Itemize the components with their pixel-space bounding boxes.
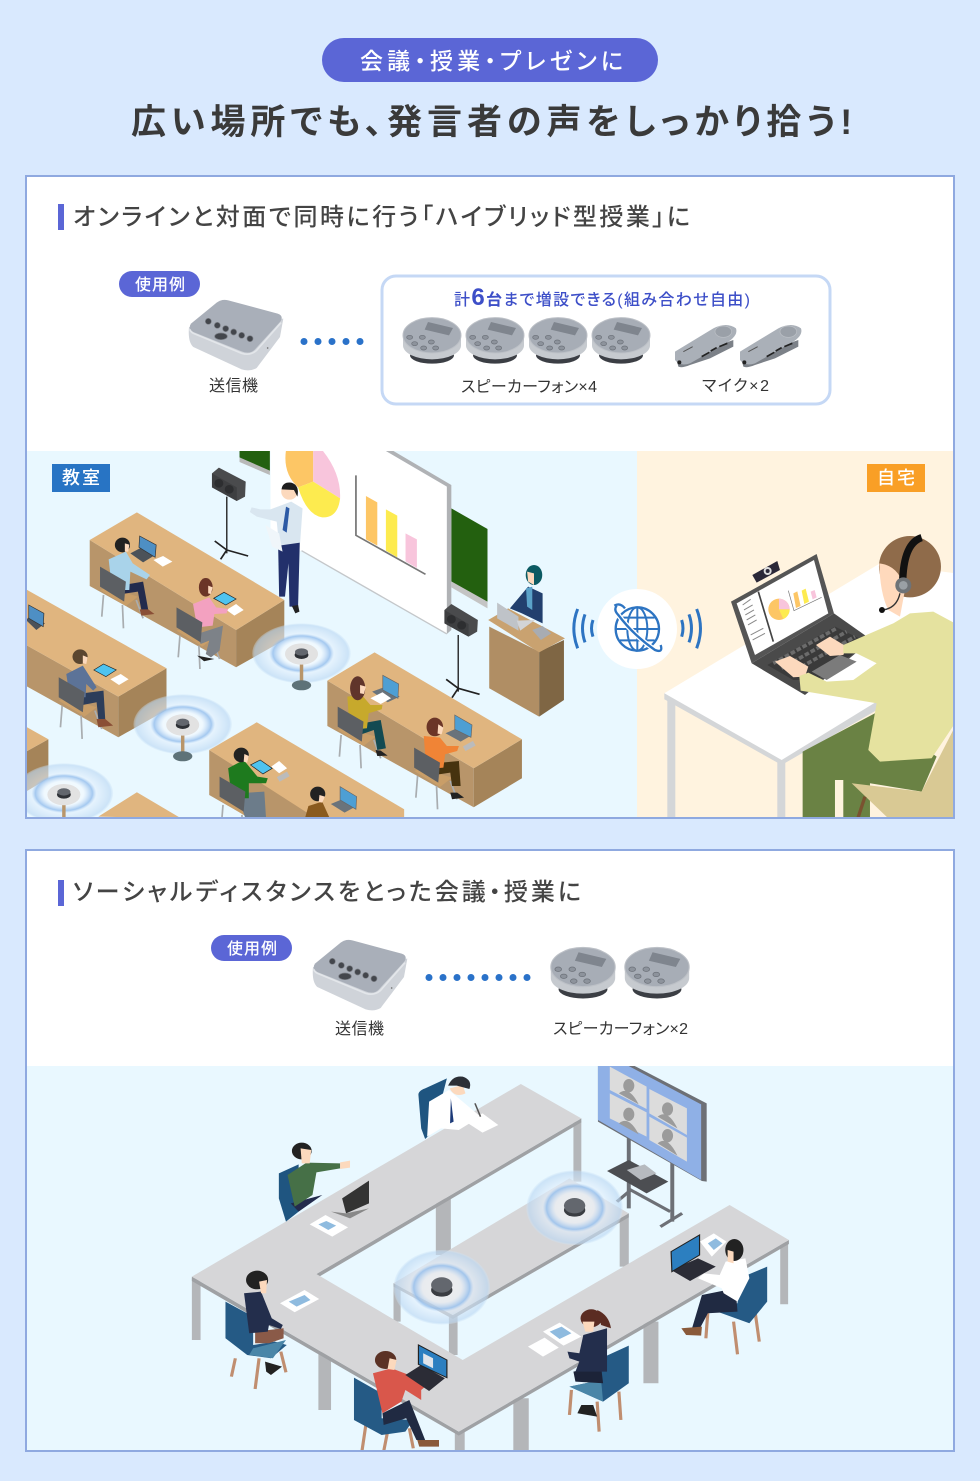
illustration: home	[637, 451, 955, 820]
desk	[664, 563, 955, 820]
tag: usage example	[119, 271, 200, 297]
student: orange blouse	[414, 718, 464, 809]
projection screen	[271, 450, 451, 634]
illustration: conference room	[27, 1065, 953, 1455]
student: green sweater	[220, 748, 268, 817]
icon: internet globe with signal arcs	[574, 589, 700, 669]
illustration: classroom	[15, 450, 637, 838]
video screen on stand	[598, 1065, 707, 1227]
speakerphone on table: left	[133, 694, 232, 761]
expansion box heading: 計6台まで増設できる(組み合わせ自由)	[454, 284, 750, 311]
student: yellow blouse	[338, 676, 388, 768]
tag: usage example	[211, 935, 292, 961]
lectern and teacher	[488, 565, 565, 717]
label: classroom: 教室	[62, 468, 100, 488]
label: mic x2: マイク×2	[702, 377, 769, 395]
label: classroom	[52, 464, 110, 492]
panel: social distancing	[26, 850, 954, 1455]
product: transmitter	[313, 940, 407, 1010]
table legs	[192, 1122, 788, 1455]
centre table	[394, 1178, 629, 1319]
label: transmitter: 送信機	[209, 377, 258, 395]
speakerphone on table: centre	[252, 623, 351, 690]
student: blue shirt	[100, 538, 154, 628]
presenter	[250, 483, 303, 613]
panel: hybrid classes	[15, 176, 955, 838]
chalkboards	[240, 450, 487, 608]
laptop	[731, 554, 872, 695]
speakerphone: upper	[526, 1170, 623, 1245]
speakerphone on table: bottom	[27, 764, 113, 817]
microphones x2	[675, 325, 801, 367]
label: speakerphone x4: スピーカーフォン×4	[461, 379, 597, 396]
label: speakerphone x2: スピーカーフォン×2	[553, 1021, 688, 1038]
attendee: green sweater	[279, 1143, 369, 1237]
attendee: white shirt top	[418, 1076, 498, 1139]
category pill: 会議・授業・プレゼンに	[360, 48, 623, 74]
tag: usage example: 使用例	[227, 940, 277, 958]
label: transmitter: 送信機	[335, 1020, 384, 1038]
label: home: 自宅	[877, 468, 915, 488]
speakerphone: lower	[394, 1250, 490, 1325]
person with headset	[775, 536, 955, 820]
student: grey-blue sweater	[59, 649, 113, 739]
attendee: navy suit ponytail	[528, 1309, 629, 1432]
label: home	[867, 464, 925, 492]
speakerphones x2	[551, 947, 689, 998]
U-shaped table	[192, 1084, 789, 1436]
desk items	[26, 536, 476, 813]
speakerphones x4	[403, 318, 650, 364]
panel heading: social distancing: ソーシャルディスタンスをとった会議・授業に	[73, 878, 581, 906]
attendee: white shirt right	[671, 1233, 767, 1354]
connection dots	[426, 974, 530, 981]
panel heading: hybrid classes: オンラインと対面で同時に行う「ハイブリッド型授業」に	[73, 203, 690, 231]
webcam	[752, 561, 780, 583]
desks	[26, 512, 522, 820]
student: pink blouse	[177, 578, 228, 669]
product: transmitter	[189, 300, 283, 370]
attendee: navy suit woman	[225, 1271, 319, 1389]
main title: 広い場所でも、発言者の声をしっかり拾う!	[131, 103, 852, 142]
left loudspeaker	[212, 468, 248, 559]
right loudspeaker	[444, 604, 480, 698]
expansion box	[382, 276, 830, 404]
tag: usage example: 使用例	[135, 276, 185, 294]
connection dots	[300, 338, 364, 345]
attendee: red sweater	[354, 1345, 447, 1452]
category pill	[322, 38, 658, 82]
student: front row	[305, 787, 330, 818]
